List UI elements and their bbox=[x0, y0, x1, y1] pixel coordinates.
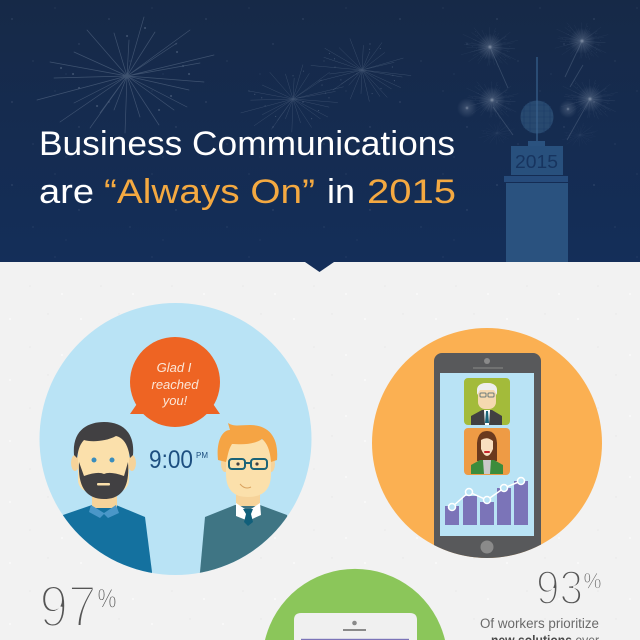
stat description bbox=[480, 616, 599, 640]
stat: 97 percent: % bbox=[98, 584, 116, 614]
sign bbox=[511, 146, 563, 175]
sign label: 2015 bbox=[515, 152, 558, 172]
tower with 2015 sign bbox=[504, 57, 568, 262]
title: in bbox=[327, 173, 355, 211]
clock: 9:00 bbox=[149, 446, 193, 474]
stat: 93 percent: % bbox=[584, 568, 602, 594]
speech bubble: Glad I bbox=[157, 360, 192, 375]
panel: phone with video contacts bbox=[372, 328, 602, 583]
header panel bbox=[0, 0, 640, 272]
stat: 93 percent: 93 bbox=[536, 562, 583, 615]
page background bbox=[0, 262, 640, 640]
pointer bbox=[305, 262, 334, 272]
phone screen bbox=[440, 373, 534, 536]
title: 2015 bbox=[367, 173, 456, 211]
fireworks bbox=[37, 10, 623, 146]
title: are bbox=[39, 173, 94, 211]
title: “Always On” bbox=[104, 173, 315, 211]
speech bubble: you! bbox=[162, 393, 188, 408]
speech bubble: reached bbox=[152, 377, 199, 392]
contact tile: man bbox=[464, 378, 510, 425]
panel: phone call illustration bbox=[40, 303, 312, 590]
man with glasses bbox=[200, 423, 288, 573]
phone body bbox=[434, 353, 541, 558]
panel: tablet illustration bbox=[265, 569, 445, 640]
stat description: Of workers prioritize bbox=[480, 616, 599, 631]
contact tile: woman bbox=[464, 428, 510, 475]
pole bbox=[536, 57, 538, 142]
speech bubble bbox=[130, 337, 220, 427]
title bbox=[39, 125, 456, 211]
ball bbox=[520, 100, 554, 134]
stat: 97 percent: 97 bbox=[40, 574, 96, 640]
bearded man bbox=[63, 422, 152, 573]
title: Business Communications bbox=[39, 125, 455, 163]
bar and line chart bbox=[445, 478, 528, 525]
clock: PM bbox=[196, 451, 208, 460]
